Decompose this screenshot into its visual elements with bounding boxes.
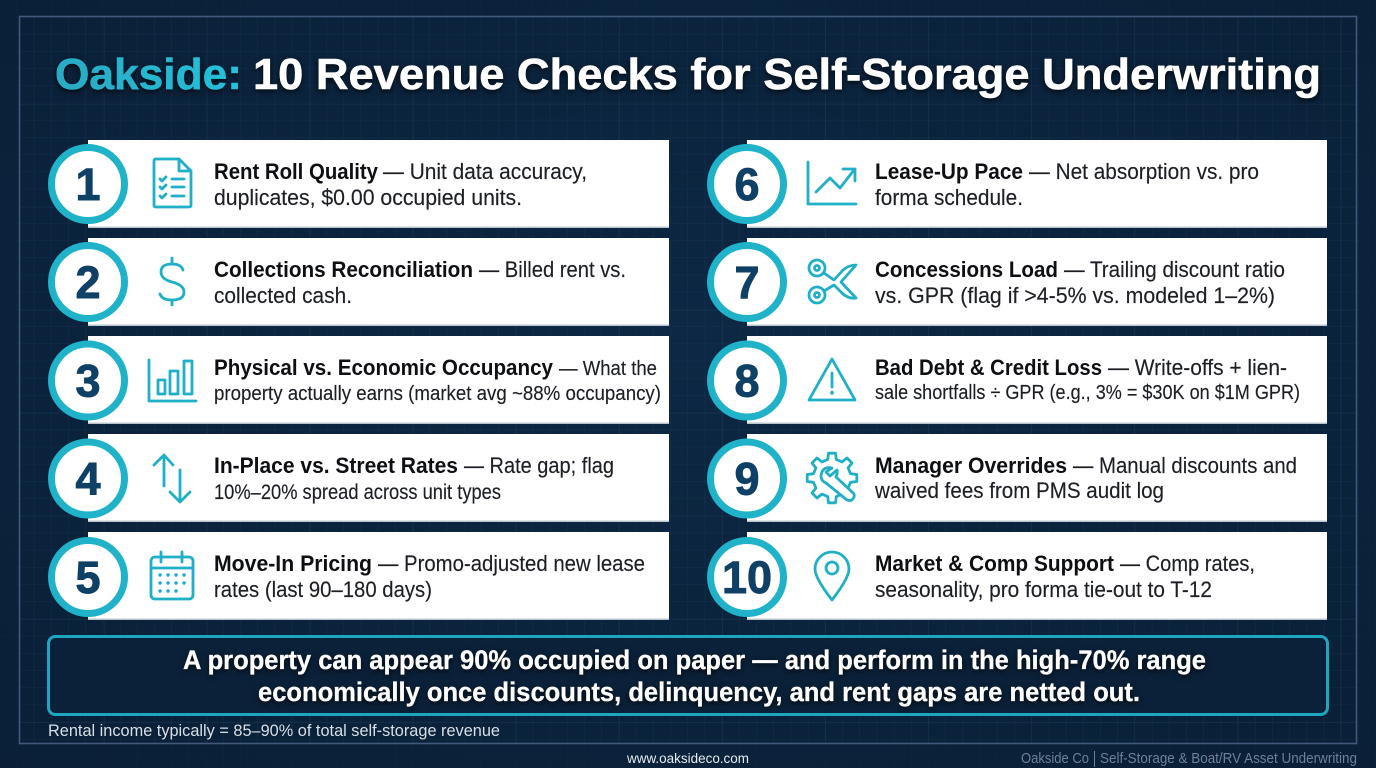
footnote: Rental income typically = 85–90% of total self-storage revenue — [48, 721, 500, 740]
text: market and comp support: seasonality, pro forma tie-out to T-12 — [875, 577, 1212, 602]
panel: check 8 bad debt and credit loss — [710, 336, 1327, 424]
panel: check 7 concessions load — [710, 238, 1327, 326]
number badge 10 — [710, 540, 784, 614]
text: rent roll quality: duplicates, $0.00 occupied units. — [214, 185, 522, 210]
text: market and comp support — [875, 551, 1255, 602]
text: collections reconciliation: Collections Reconciliation — [214, 257, 473, 282]
number badge 7: 7 — [734, 257, 760, 308]
icon: calendar — [151, 552, 193, 599]
text: rent roll quality: Rent Roll Quality — [214, 159, 379, 184]
callout: key takeaway — [48, 636, 1328, 714]
icon: gear and wrench — [807, 453, 857, 503]
text: collections reconciliation: collected cash. — [214, 283, 352, 308]
text: move-in pricing: Move-In Pricing — [214, 551, 372, 576]
panel: check 5 move-in pricing — [52, 532, 669, 620]
text: concessions load: vs. GPR (flag if >4-5% vs. modeled 1–2%) — [875, 283, 1275, 308]
panel: check 3 physical vs economic occupancy — [52, 336, 669, 424]
number badge 8 — [710, 344, 784, 417]
text: collections reconciliation: — Billed rent vs. — [479, 257, 626, 282]
number badge 5: 5 — [75, 552, 101, 603]
text: manager overrides: — Manual discounts and — [1073, 453, 1297, 478]
text: collections reconciliation — [214, 257, 626, 308]
text: manager overrides — [874, 453, 1297, 503]
icon: dollar sign — [160, 258, 184, 305]
text: market and comp support: — Comp rates, — [1120, 551, 1255, 576]
text: rent roll quality — [214, 159, 587, 210]
text: manager overrides: waived fees from PMS audit log — [874, 478, 1164, 503]
callout: key takeaway: A property can appear 90% occupied on paper — and perform in the high-70% range — [183, 645, 1206, 675]
panel: check 1 rent roll quality — [52, 140, 669, 228]
icon: warning triangle — [809, 359, 855, 400]
text: manager overrides: Manager Overrides — [875, 453, 1067, 478]
number badge 8: 8 — [734, 356, 760, 406]
panel: check 6 lease-up pace — [710, 140, 1327, 228]
text: concessions load: — Trailing discount ratio — [1064, 257, 1285, 282]
footer: website: www.oaksideco.com — [626, 751, 749, 766]
icon: up and down arrows — [154, 455, 190, 502]
text: lease-up pace: forma schedule. — [875, 185, 1023, 210]
footer: company line: Oakside Co — [1021, 751, 1089, 767]
text: bad debt and credit loss: — Write-offs + lien- — [1108, 355, 1287, 380]
text: concessions load — [875, 257, 1285, 308]
text: bad debt and credit loss: Bad Debt & Credit Loss — [875, 355, 1102, 380]
panel: check 9 manager overrides — [710, 434, 1327, 522]
title: 10 Revenue Checks for Self-Storage Underwriting — [253, 50, 1321, 99]
number badge 1: 1 — [75, 159, 101, 210]
number badge 2: 2 — [75, 257, 101, 308]
text: rent roll quality: — Unit data accuracy, — [383, 159, 587, 184]
text: lease-up pace: — Net absorption vs. pro — [1029, 159, 1259, 184]
callout: key takeaway: economically once discounts, delinquency, and rent gaps are netted out. — [258, 677, 1140, 707]
text: physical vs economic occupancy — [214, 355, 661, 405]
text: physical vs economic occupancy: Physical vs. Economic Occupancy — [214, 355, 554, 380]
text: bad debt and credit loss — [875, 355, 1300, 404]
text: physical vs economic occupancy: — What the — [559, 358, 657, 380]
footer: company line: Self-Storage & Boat/RV Asset Underwriting — [1100, 751, 1357, 767]
text: lease-up pace: Lease-Up Pace — [875, 159, 1023, 184]
text: move-in pricing: — Promo-adjusted new lease — [378, 551, 645, 576]
number badge 4: 4 — [75, 454, 101, 504]
title: Oakside: — [55, 50, 242, 99]
number badge 9 — [710, 442, 784, 515]
number badge 1 — [52, 148, 124, 220]
number badge 2 — [52, 246, 124, 318]
icon: scissors — [809, 260, 856, 303]
icon: bar chart — [149, 360, 196, 401]
text: concessions load: Concessions Load — [875, 257, 1058, 282]
icon: location pin — [815, 552, 849, 600]
panel: check 4 in-place vs street rates — [52, 434, 669, 522]
number badge 6: 6 — [734, 159, 760, 210]
text: in-place vs street rates: 10%–20% spread across unit types — [214, 481, 501, 504]
text: bad debt and credit loss: sale shortfalls ÷ GPR (e.g., 3% = $30K on $1M GPR) — [875, 382, 1300, 404]
panel: check 2 collections reconciliation — [52, 238, 669, 326]
text: lease-up pace — [875, 159, 1259, 210]
number badge 3 — [52, 344, 124, 417]
text: in-place vs street rates — [214, 453, 614, 504]
number badge 7 — [710, 246, 784, 318]
number badge 3: 3 — [75, 356, 101, 406]
text: move-in pricing — [214, 551, 645, 602]
icon: checklist document — [154, 159, 191, 207]
number badge 6 — [710, 148, 784, 220]
number badge 9: 9 — [734, 454, 760, 504]
icon: line chart trending up — [808, 162, 856, 204]
panel: check 10 market and comp support — [710, 532, 1327, 620]
text: physical vs economic occupancy: property actually earns (market avg ~88% occupancy) — [214, 383, 661, 405]
text: in-place vs street rates: — Rate gap; flag — [464, 453, 614, 478]
number badge 10: 10 — [722, 552, 772, 603]
text: move-in pricing: rates (last 90–180 days) — [214, 577, 432, 602]
number badge 4 — [52, 442, 124, 515]
text: market and comp support: Market & Comp Support — [875, 551, 1115, 576]
text: in-place vs street rates: In-Place vs. Street Rates — [214, 453, 458, 478]
number badge 5 — [52, 540, 124, 614]
